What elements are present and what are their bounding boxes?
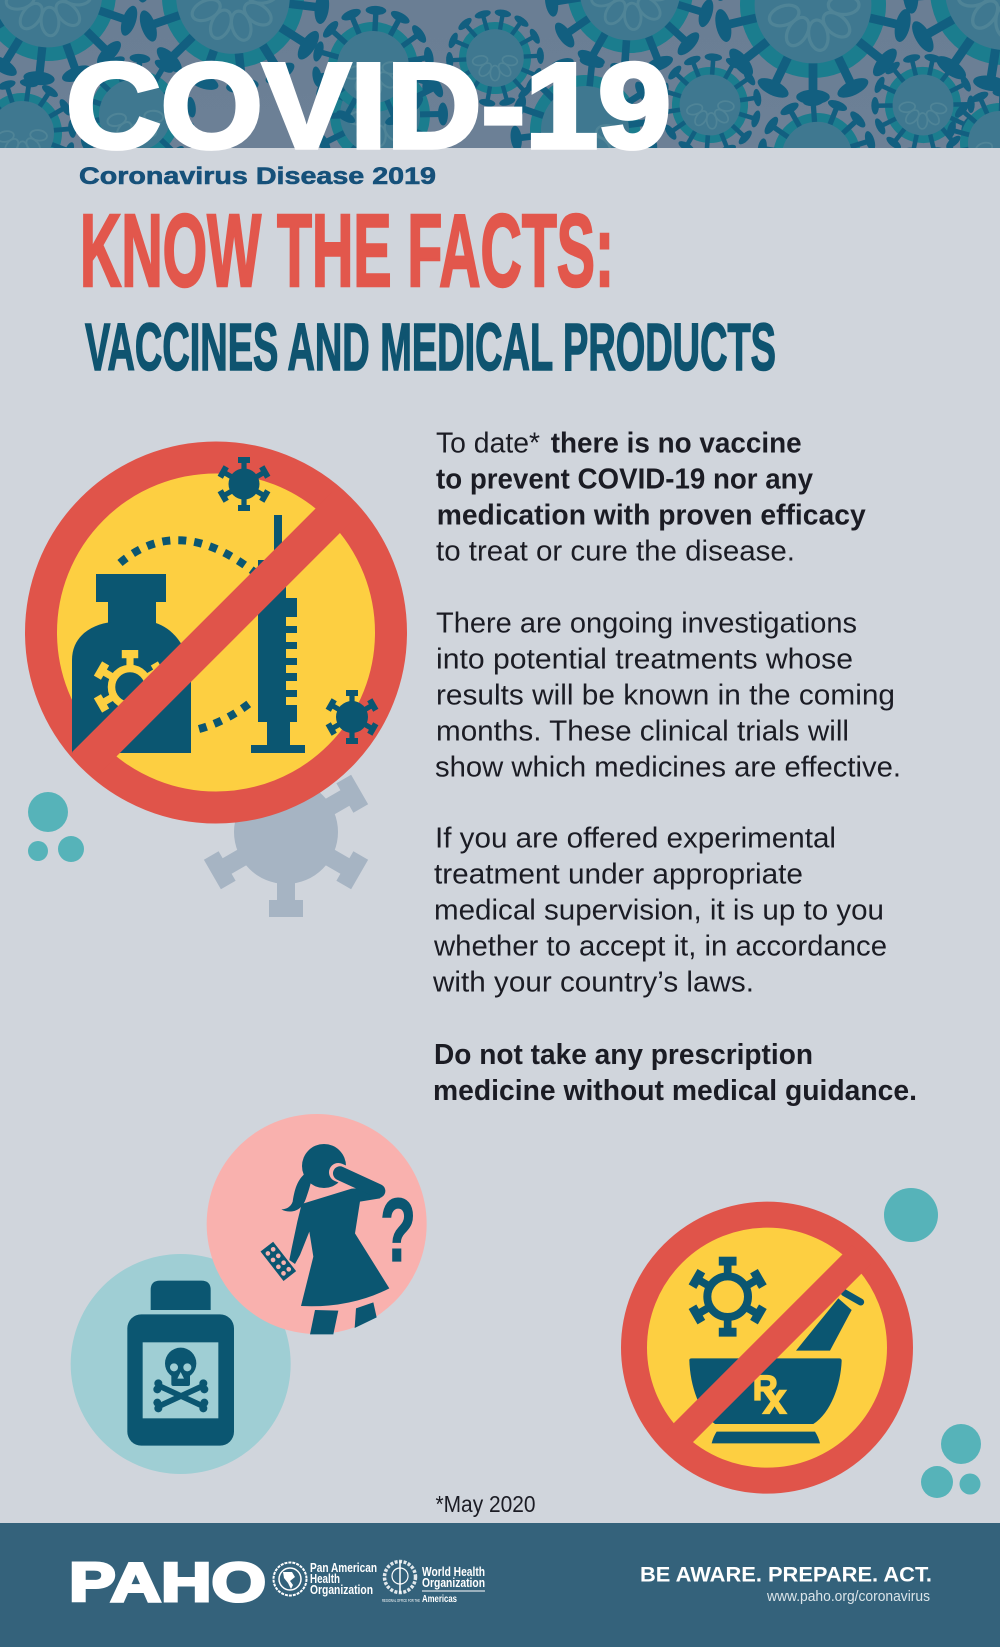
text block: medical guidance warning <box>433 1039 917 1107</box>
text block: no vaccine: To date* <box>436 428 540 460</box>
icon: no self-medication prohibition sign <box>634 1215 900 1481</box>
text block: medical guidance warning: medicine without medical guidance. <box>433 1075 917 1107</box>
dotted arc between bottle and syringe <box>120 540 258 729</box>
logo text: World Health Organization Americas: Americas <box>422 1594 457 1605</box>
prohibition bar <box>84 504 344 764</box>
logo text: Pan American Health Organization: Organization <box>310 1582 373 1597</box>
text block: no vaccine: there is no vaccine <box>551 428 802 460</box>
text block: experimental treatment <box>432 823 887 999</box>
decorative teal dots right <box>884 1188 981 1498</box>
text block: no vaccine: medication with proven efficacy <box>437 500 866 532</box>
decorative teal dots left <box>28 792 84 862</box>
text block: experimental treatment: with your country’s laws. <box>432 967 754 999</box>
logo text: Pan American Health Organization: Health <box>310 1571 340 1586</box>
prohibition bar <box>675 1254 862 1441</box>
icon: no vaccine or medication prohibition sign <box>41 457 391 808</box>
slogan: BE AWARE. PREPARE. ACT. <box>640 1564 932 1586</box>
logo text: World Health Organization Americas: World Health <box>422 1564 485 1579</box>
icon: small virus top <box>218 457 270 511</box>
icon: question mark: ? <box>380 1181 416 1281</box>
text block: ongoing investigations: into potential treatments whose <box>436 643 853 675</box>
logo text: World Health Organization Americas <box>382 1564 485 1605</box>
icon: medicine bottle <box>72 574 191 753</box>
logo: PAHO globe emblem <box>274 1562 306 1596</box>
logo text: World Health Organization Americas: REGIONAL OFFICE FOR THE <box>382 1598 420 1603</box>
text block: no vaccine: to treat or cure the disease. <box>436 536 795 568</box>
Rx symbol: x <box>763 1375 787 1423</box>
text block: experimental treatment: If you are offered experimental <box>435 823 836 855</box>
header band: virus pattern <box>0 0 1000 148</box>
icon: small virus right <box>326 690 378 744</box>
footnote: *May 2020 <box>436 1491 536 1517</box>
text block: no vaccine: to prevent COVID-19 nor any <box>436 464 813 496</box>
icon: virus on bottle <box>94 650 166 724</box>
text block: ongoing investigations: results will be known in the coming <box>436 679 895 711</box>
subtitle: Coronavirus Disease 2019: Coronavirus Disease 2019 <box>79 163 436 190</box>
icon: confused woman with pills in pink circle <box>207 1114 427 1334</box>
icon: syringe <box>251 515 305 753</box>
logo text: World Health Organization Americas: Organization <box>422 1575 485 1590</box>
title: COVID-19: COVID-19 <box>66 38 671 174</box>
footer band <box>0 1523 1000 1647</box>
website: www.paho.org/coronavirus <box>766 1588 930 1605</box>
text block: medical guidance warning: Do not take any prescription <box>434 1039 813 1071</box>
logo: WHO emblem <box>384 1561 416 1593</box>
icon: mortar and pestle <box>689 1293 861 1443</box>
Rx symbol <box>753 1369 787 1423</box>
logo text: Pan American Health Organization: Pan American <box>310 1560 377 1575</box>
icon: poison bottle in blue circle <box>71 1254 291 1474</box>
text block: ongoing investigations: show which medicines are effective. <box>435 751 901 783</box>
icon: virus outline <box>689 1257 767 1337</box>
logo text: Pan American Health Organization <box>310 1560 377 1597</box>
logo: PAHO wordmark: PAHO <box>69 1551 266 1613</box>
text block: ongoing investigations: months. These clinical trials will <box>436 715 849 747</box>
text block: no vaccine <box>436 428 866 568</box>
text block: experimental treatment: medical supervision, it is up to you <box>434 895 884 927</box>
Rx symbol: R <box>753 1369 778 1408</box>
text block: ongoing investigations: There are ongoing investigations <box>436 607 857 639</box>
icon: gray virus <box>204 747 368 917</box>
text block: experimental treatment: whether to accept it, in accordance <box>433 931 887 963</box>
text block: experimental treatment: treatment under appropriate <box>434 859 803 891</box>
text block: ongoing investigations <box>435 607 901 783</box>
